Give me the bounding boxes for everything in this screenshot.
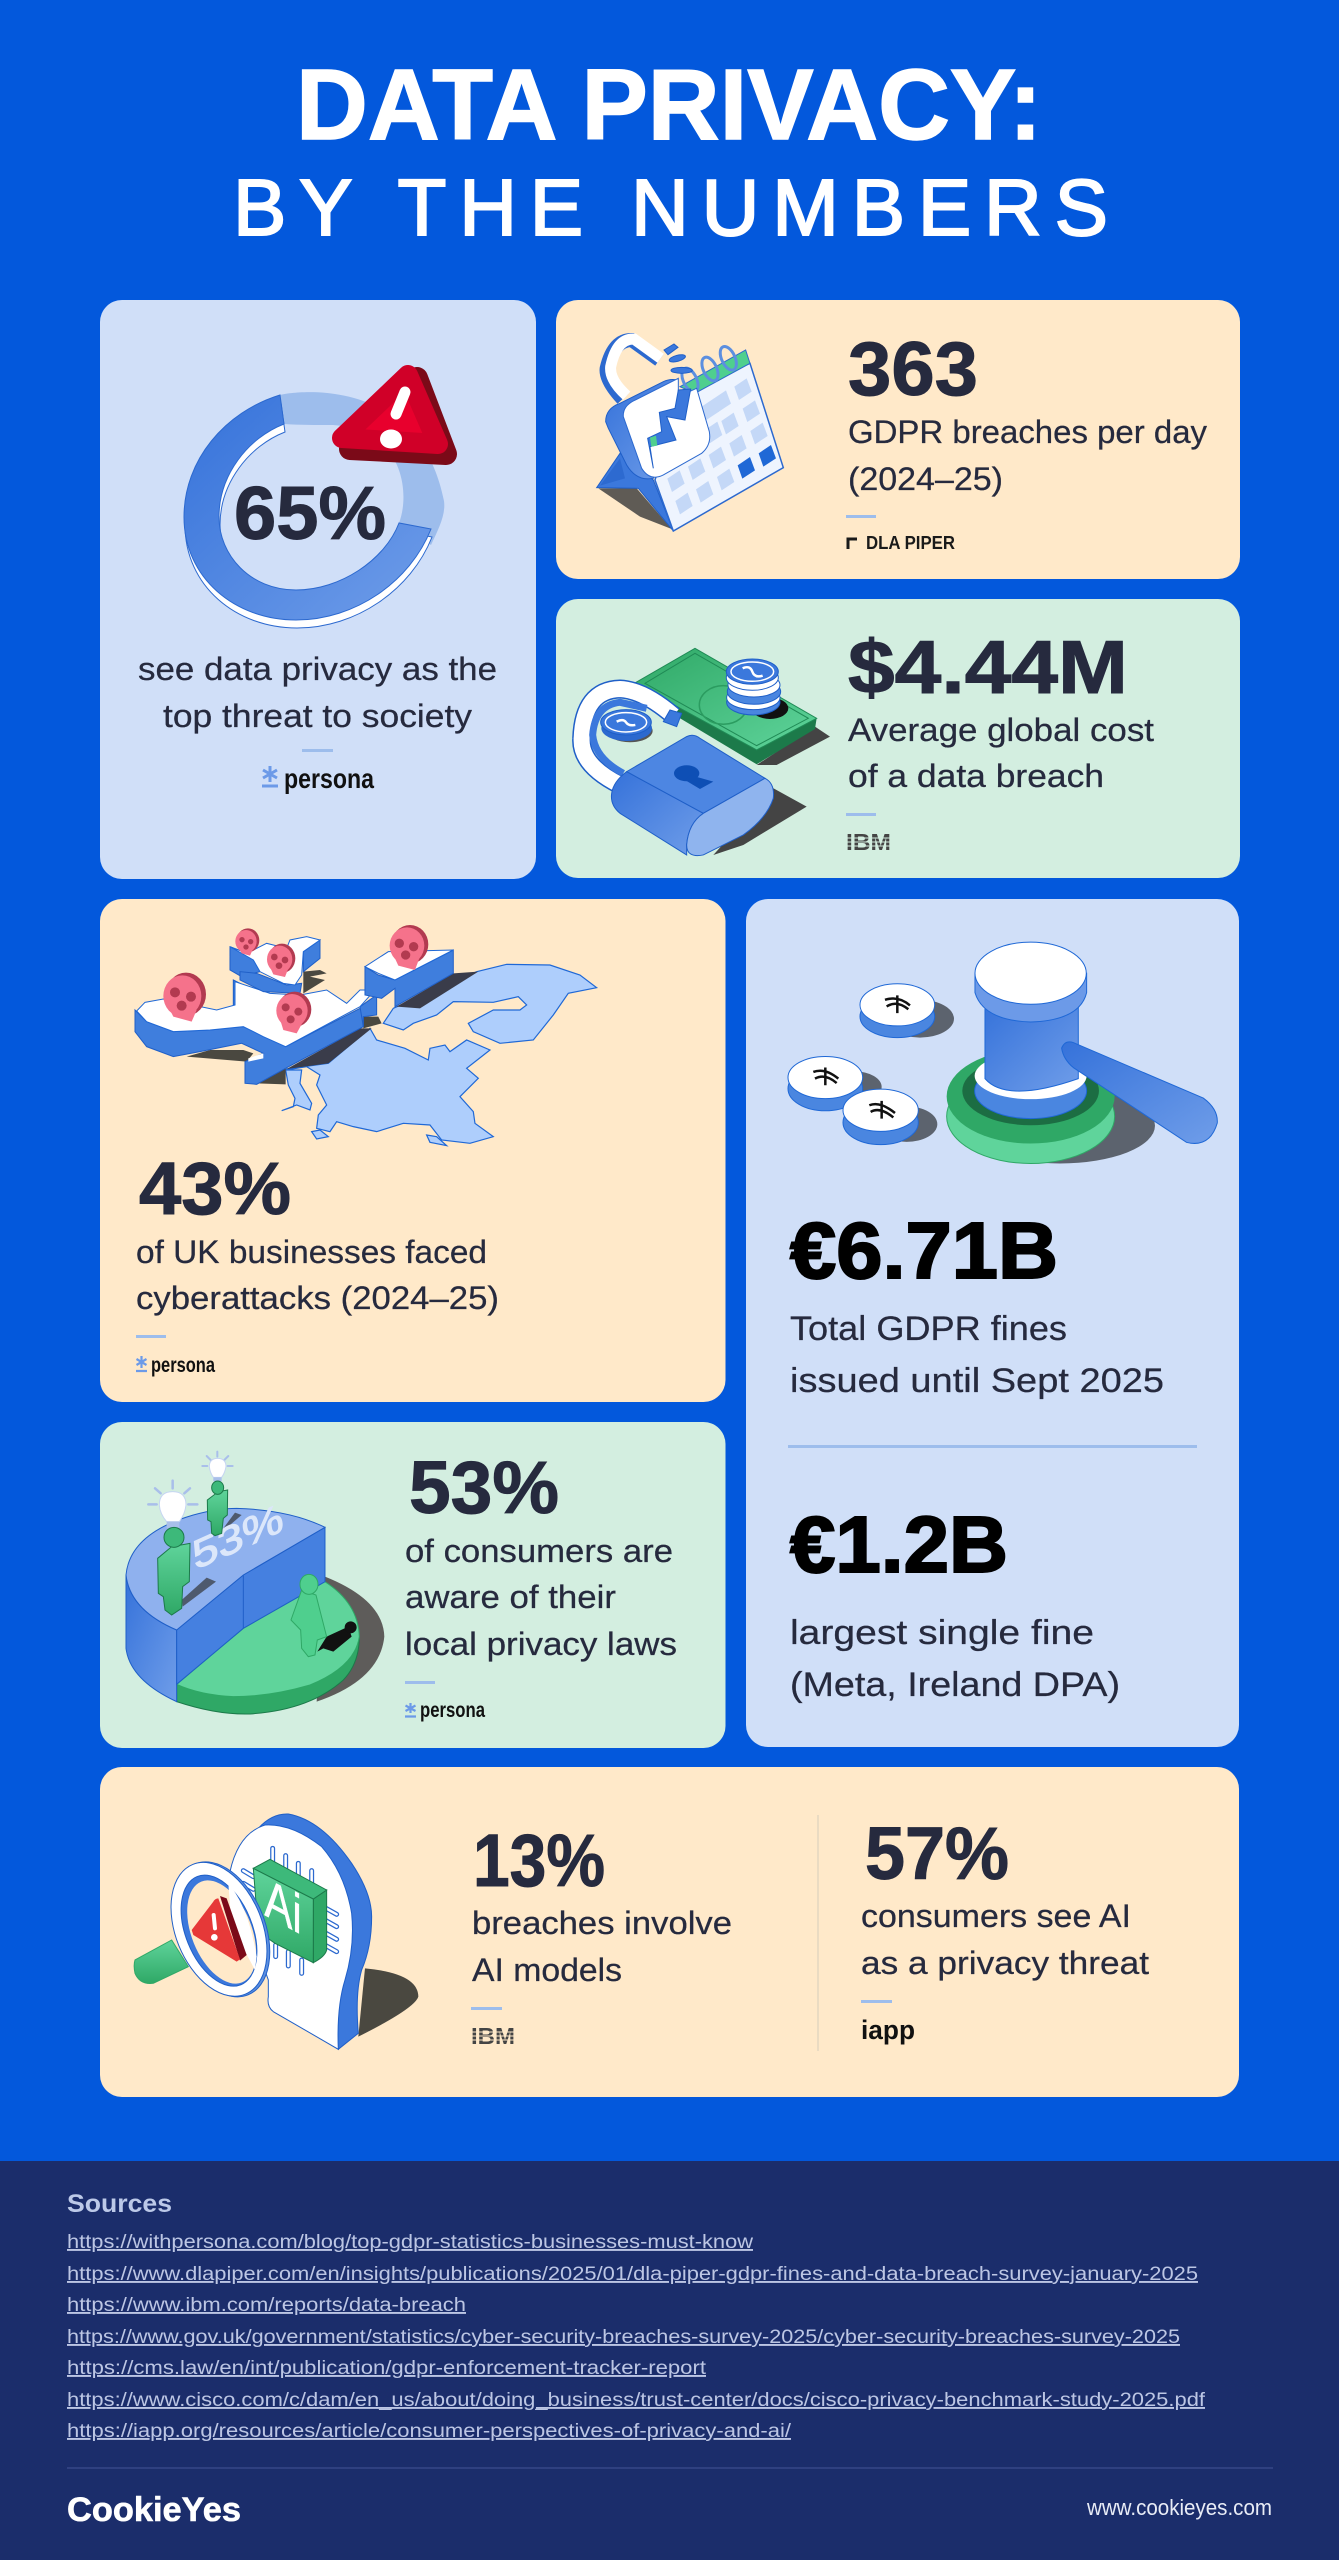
description: Average global cost — [848, 712, 1154, 748]
stat: 57%: 57% — [865, 1812, 1009, 1895]
logo: persona: persona — [420, 1699, 485, 1722]
panel: AI privacy — [100, 1767, 1239, 2097]
description: of UK businesses faced — [136, 1234, 487, 1270]
source links: https://www.dlapiper.com/en/insights/publications/2025/01/dla-piper-gdpr-fines-and-data-breach-survey-january-2025 — [67, 2264, 1198, 2285]
icon: calendar with broken lock — [597, 339, 783, 531]
icon: skull centre — [276, 992, 311, 1033]
icon: 3D pie chart with people: 53% — [190, 1496, 286, 1579]
icon: magnifier over AI chip — [134, 1814, 418, 2049]
icon: donut chart with warning triangle — [184, 375, 446, 628]
footer: sources — [0, 2161, 1339, 2560]
description: largest single fine — [790, 1614, 1094, 1652]
logo: DLA Piper: DLA PIPER — [866, 533, 955, 553]
stat: 1.2B largest fine: €1.2B — [790, 1500, 1008, 1589]
icon: person right — [291, 1574, 327, 1657]
panel: 65% top threat — [100, 300, 536, 879]
source links: https://www.cisco.com/c/dam/en_us/about/doing_business/trust-center/docs/cisco-privacy-benchmark-study-2025.pdf — [67, 2390, 1206, 2411]
description — [861, 1898, 1149, 1981]
title: BY THE NUMBERS — [233, 163, 1108, 252]
logo: persona — [262, 763, 374, 794]
description — [848, 414, 1207, 497]
icon: person middle — [207, 1481, 228, 1536]
source links: https://www.gov.uk/government/statistics/cyber-security-breaches-survey-2025/cyber-security-breaches-survey-2025 — [67, 2327, 1180, 2348]
icon: 3D pie chart with people — [126, 1452, 384, 1714]
description: GDPR breaches per day — [848, 414, 1207, 450]
stat: 43%: 43% — [139, 1147, 291, 1230]
icon: lightbulb left — [148, 1481, 197, 1528]
stat: 53%: 53% — [409, 1446, 559, 1529]
description: (2024–25) — [848, 461, 1003, 497]
stat: 363: 363 — [848, 327, 978, 412]
panel: $4.44M data breach cost — [556, 599, 1240, 878]
description: as a privacy threat — [861, 1945, 1149, 1981]
description: breaches involve — [472, 1905, 732, 1941]
icon: padlock with money — [582, 648, 830, 856]
stat: 65%: 65% — [234, 471, 386, 555]
title: DATA PRIVACY: — [296, 49, 1042, 161]
description: local privacy laws — [405, 1626, 677, 1662]
icon: gavel and coins — [788, 942, 1217, 1164]
logo: persona: persona — [151, 1354, 215, 1377]
description: consumers see AI — [861, 1898, 1131, 1934]
icon: person left — [158, 1527, 190, 1615]
description — [136, 1234, 499, 1316]
description: Total GDPR fines — [790, 1310, 1067, 1348]
source links: https://iapp.org/resources/article/consumer-perspectives-of-privacy-and-ai/ — [67, 2421, 792, 2442]
panel: GDPR fines — [746, 899, 1239, 1747]
stat: 13%: 13% — [473, 1819, 605, 1902]
icon: skull top small — [235, 928, 259, 956]
heading: sources: Sources — [67, 2190, 172, 2218]
icon: coins — [788, 984, 935, 1145]
description: AI models — [472, 1952, 622, 1988]
description: of a data breach — [848, 758, 1104, 794]
source links — [67, 2232, 1206, 2442]
icon: skull right — [390, 925, 428, 970]
title — [233, 49, 1108, 252]
icon: skull left — [163, 973, 206, 1022]
description: issued until Sept 2025 — [790, 1362, 1164, 1400]
logo: persona — [136, 1354, 215, 1377]
source links: https://cms.law/en/int/publication/gdpr-enforcement-tracker-report — [67, 2358, 707, 2379]
description: aware of their — [405, 1579, 616, 1615]
description: of consumers are — [405, 1533, 673, 1569]
panel: 53% privacy law awareness — [100, 1422, 726, 1748]
website url: www.cookieyes.com — [1086, 2495, 1272, 2520]
description — [790, 1614, 1120, 1704]
icon: skull top medium — [267, 944, 295, 977]
description — [790, 1310, 1164, 1400]
logo: persona — [405, 1699, 485, 1722]
stat: 6.71B total fines: €6.71B — [790, 1206, 1058, 1295]
description: see data privacy as the — [138, 651, 497, 687]
logo: iapp: iapp — [861, 2015, 915, 2045]
source links: https://withpersona.com/blog/top-gdpr-statistics-businesses-must-know — [67, 2232, 753, 2253]
panel: 363 GDPR breaches — [556, 300, 1240, 579]
logo: IBM: IBM — [471, 2023, 515, 2049]
description: top threat to society — [163, 698, 472, 734]
icon: lightbulb right — [202, 1452, 233, 1481]
logo: persona: persona — [284, 763, 374, 794]
description: (Meta, Ireland DPA) — [790, 1666, 1120, 1704]
description — [405, 1533, 677, 1662]
icon: magnifier over AI chip: Ai — [264, 1866, 302, 1947]
description — [472, 1905, 732, 1988]
description: cyberattacks (2024–25) — [136, 1280, 499, 1316]
icon: map of Europe with skulls — [135, 925, 597, 1146]
source links: https://www.ibm.com/reports/data-breach — [67, 2295, 466, 2316]
description — [848, 712, 1154, 794]
description — [138, 651, 497, 734]
logo: CookieYes: CookieYes — [67, 2491, 241, 2529]
logo: IBM: IBM — [846, 829, 891, 855]
panel: 43% UK businesses — [100, 899, 726, 1402]
stat: $4.44M: $4.44M — [848, 625, 1128, 709]
